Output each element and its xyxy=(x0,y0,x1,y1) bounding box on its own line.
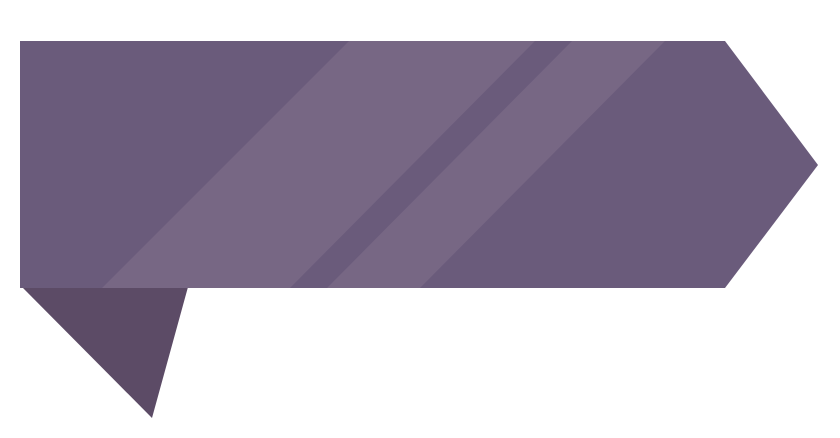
light band 2 xyxy=(327,41,665,288)
main banner body xyxy=(20,41,818,288)
light band 1 xyxy=(102,41,535,288)
fold tab xyxy=(22,287,188,418)
